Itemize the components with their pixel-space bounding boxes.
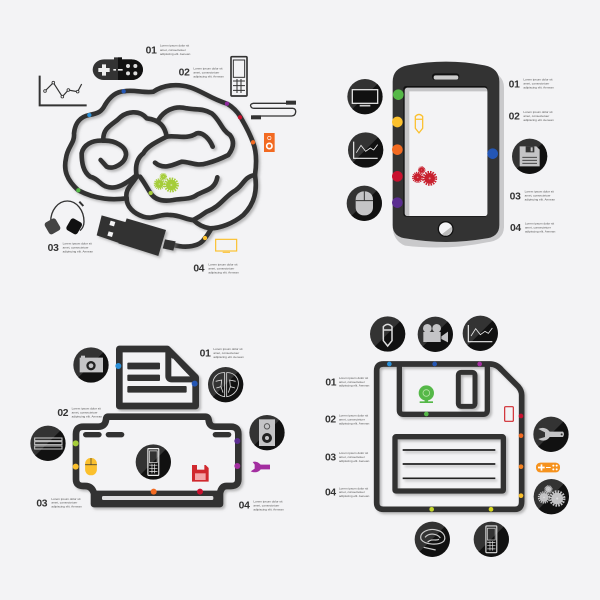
label 01: adipiscing elit. Aenean <box>213 355 244 359</box>
label 03: Lorem ipsum dolor sit <box>51 497 81 501</box>
label 02: adipiscing elit. Aenean <box>339 421 370 425</box>
icon: green webcam <box>419 385 434 403</box>
label 01 <box>200 347 244 359</box>
icon: headset <box>44 201 84 235</box>
label 04: adipiscing elit. Aenean <box>339 494 370 498</box>
label 03 <box>325 451 370 463</box>
label 01: amet, consectetuer <box>523 82 549 86</box>
icon: pencil circle <box>370 316 405 352</box>
icon: phone circle <box>474 522 509 557</box>
icon: usb plug <box>97 215 176 256</box>
label 04: adipiscing elit. Aenean <box>208 270 239 274</box>
label 03: 03 <box>36 498 48 509</box>
label 04: 04 <box>193 264 205 275</box>
label 04: adipiscing elit. Aenean <box>525 229 556 233</box>
label 02: adipiscing elit. Aenean <box>193 74 224 78</box>
label 03: adipiscing elit. Aenean <box>339 459 370 463</box>
label 03: adipiscing elit. Aenean <box>51 504 82 508</box>
label 04: 04 <box>239 501 250 512</box>
label 01 <box>325 376 370 388</box>
label 02: 02 <box>325 415 336 426</box>
colored nodes <box>76 89 255 240</box>
label 03: Lorem ipsum dolor sit <box>525 190 554 194</box>
icon: phone circle <box>136 444 171 480</box>
label 02: amet, consectetuer <box>339 417 365 421</box>
floppy outline <box>377 364 522 509</box>
label 03: 03 <box>325 452 336 463</box>
phone body <box>393 62 504 248</box>
brain line diagram <box>65 85 256 247</box>
colored buttons <box>392 89 498 208</box>
label 01: Lorem ipsum dolor sit <box>339 376 368 380</box>
icon: purple wrench <box>251 462 270 472</box>
label 01: 01 <box>146 45 157 56</box>
icon: red phone <box>505 407 513 421</box>
icon: wrench circle <box>533 417 569 452</box>
label 02: amet, consectetuer <box>523 114 549 118</box>
label 01: 01 <box>509 79 520 90</box>
icon: chart circle <box>348 132 383 168</box>
icon: brain circle <box>208 367 243 402</box>
label 04: 04 <box>510 223 521 234</box>
label 02: amet, consectetuer <box>193 70 219 74</box>
icon: camera circle <box>73 347 109 383</box>
label 02: Lorem ipsum dolor sit <box>339 414 368 418</box>
icon: mouse circle <box>347 186 382 221</box>
label 02: 02 <box>179 68 190 79</box>
label 04: Lorem ipsum dolor sit <box>525 221 554 225</box>
panel: brain infographic <box>40 44 296 275</box>
panel: floppy disk infographic <box>325 316 569 557</box>
label 03: amet, consectetuer <box>339 455 365 459</box>
label 01: adipiscing elit. Aenean <box>160 52 191 56</box>
label 03: 03 <box>510 191 521 202</box>
icon: gamepad <box>93 57 143 80</box>
label 04: Lorem ipsum dolor sit <box>339 486 368 490</box>
colored nodes <box>387 362 523 512</box>
label 01: 01 <box>200 348 211 359</box>
label 02: Lorem ipsum dolor sit <box>523 110 553 114</box>
label 03 <box>48 242 93 254</box>
label 04 <box>239 499 284 512</box>
icon: brain circle <box>415 522 450 557</box>
label 01: Lorem ipsum dolor sit <box>213 347 243 351</box>
label 03: 03 <box>48 243 59 254</box>
label 03: adipiscing elit. Aenean <box>63 250 93 254</box>
label 01: adipiscing elit. Aenean <box>339 384 370 388</box>
icon: gears circle <box>534 479 569 514</box>
label 04: amet, consectetuer <box>208 266 234 270</box>
label 02 <box>57 407 102 419</box>
label 04 <box>325 486 370 499</box>
label 04 <box>510 221 556 234</box>
document outline <box>119 349 196 406</box>
label 03: amet, consectetuer <box>63 246 89 250</box>
label 01: amet, consectetuer <box>213 351 239 355</box>
icon: cables circle <box>30 426 66 461</box>
printer outline <box>76 417 238 507</box>
icon: green gears <box>155 173 178 191</box>
label 02: adipiscing elit. Aenean <box>72 415 102 419</box>
label 01 <box>146 44 191 56</box>
panel: smartphone infographic <box>347 62 556 248</box>
label 04: amet, consectetuer <box>339 490 365 494</box>
label 03: amet, consectetuer <box>525 194 551 198</box>
icon: red floppy <box>192 465 209 482</box>
label 04 <box>193 262 239 275</box>
icon: yellow pencil <box>415 114 423 133</box>
label 02: Lorem ipsum dolor sit <box>193 66 223 70</box>
label 02: 02 <box>57 408 69 419</box>
icon: line chart <box>40 76 87 105</box>
icon: red gears <box>413 167 436 185</box>
panel: printer infographic <box>30 347 285 512</box>
label 04: Lorem ipsum dolor sit <box>208 262 238 266</box>
label 01: amet, consectetuer <box>339 380 365 384</box>
label 01: adipiscing elit. Aenean <box>523 86 554 90</box>
icon: cables <box>251 101 296 119</box>
label 01: amet, consectetuer <box>160 48 186 52</box>
label 04: amet, consectetuer <box>253 503 279 507</box>
label 03: Lorem ipsum dolor sit <box>339 451 368 455</box>
label 01 <box>509 78 554 90</box>
label 02 <box>325 414 370 426</box>
icon: mobile phone <box>231 57 247 96</box>
icon: speaker circle <box>249 415 285 450</box>
icon: monitor circle <box>347 79 383 114</box>
label 02: adipiscing elit. Aenean <box>523 118 554 122</box>
label 01: Lorem ipsum dolor sit <box>160 44 189 48</box>
icon: yellow mouse <box>85 458 97 475</box>
icon: chart circle <box>463 316 498 351</box>
label 04: adipiscing elit. Aenean <box>253 507 284 511</box>
icon: orange gamepad <box>536 463 560 472</box>
label 04: Lorem ipsum dolor sit <box>253 499 283 503</box>
label 04: 04 <box>325 488 336 499</box>
label 03: amet, consectetuer <box>51 501 77 505</box>
label 02: amet, consectetuer <box>72 411 98 415</box>
icon: video camera circle <box>418 317 453 352</box>
label 03 <box>510 190 555 202</box>
label 03 <box>36 497 82 509</box>
label 01: Lorem ipsum dolor sit <box>523 78 553 82</box>
label 02: Lorem ipsum dolor sit <box>72 407 101 411</box>
icon: yellow monitor <box>216 239 237 252</box>
label 02 <box>179 66 224 79</box>
label 02: 02 <box>509 111 520 122</box>
icon: orange speaker <box>264 133 275 152</box>
label 03: adipiscing elit. Aenean <box>525 198 555 202</box>
label 03: Lorem ipsum dolor sit <box>63 242 92 246</box>
icon: floppy circle <box>512 139 547 174</box>
label 04: amet, consectetuer <box>525 225 551 229</box>
label 01: 01 <box>325 377 337 388</box>
colored nodes <box>73 363 240 495</box>
label 02 <box>509 110 554 122</box>
